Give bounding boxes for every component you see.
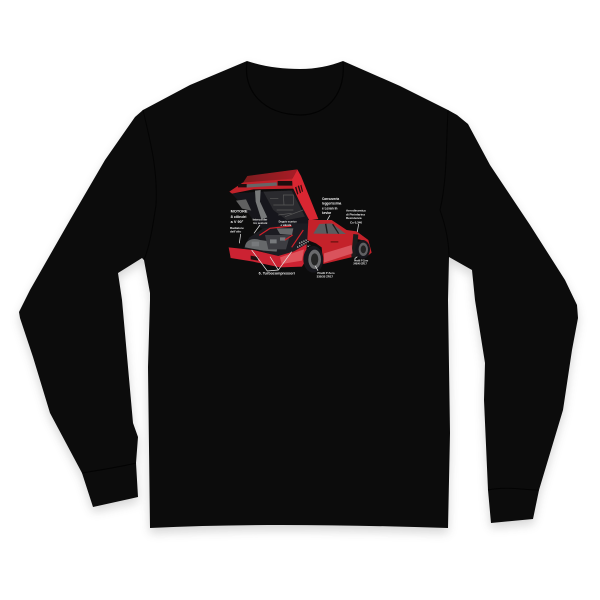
car illustration [229, 169, 372, 278]
label: aerodynamics: di Pininfarina [346, 213, 365, 217]
label: exhaust: Doppio scarico [279, 221, 297, 224]
label: aerodynamics: Cx 0,340 [350, 220, 362, 224]
label: engine: 8 cilindri [231, 215, 246, 219]
label: engine: a V 90° [231, 220, 244, 224]
label: front tyres: 245/40 ZR17 [353, 263, 367, 266]
sleeve cuff seams [82, 463, 539, 490]
rear bumper [229, 244, 307, 267]
front wheel [355, 240, 370, 259]
label: intercooler: tre sezioni [253, 221, 268, 225]
shirt shadow [19, 66, 578, 533]
label: engine: MOTORE [231, 210, 248, 214]
label: aerodynamics: Aerodinamica [346, 209, 366, 213]
long sleeve t-shirt [19, 61, 578, 528]
collar [246, 62, 343, 115]
label: turbochargers: 6. Turbocompressori [259, 272, 295, 276]
engine lid interior [232, 190, 309, 232]
engine lid red panels [229, 169, 318, 220]
label: rear tyres: Pirelli P Zero [317, 271, 335, 275]
annotation lines [239, 215, 359, 271]
engine bay [243, 223, 310, 256]
label: intercooler: Intercooler [253, 218, 268, 222]
shirt silhouette [19, 61, 578, 528]
shoulder and sleeve seams [143, 110, 449, 260]
label: bodywork: e Lexan in [322, 206, 337, 210]
rear wheel [303, 246, 323, 273]
label: bodywork: kevlar [322, 211, 332, 215]
label: front tyres: Pirelli P Zero [354, 260, 369, 262]
label: oil radiator: Radiatore [230, 226, 244, 230]
label: aerodynamics: Resistenza [346, 216, 362, 220]
label: bodywork: Carrozzeria [322, 197, 339, 201]
label: exhaust: e valvola [281, 224, 292, 227]
car body [307, 220, 372, 264]
label: oil radiator: dell'olio [230, 229, 241, 233]
label: bodywork: leggerissima [322, 202, 342, 206]
label: rear tyres: 335/35 ZR17 [317, 274, 333, 278]
